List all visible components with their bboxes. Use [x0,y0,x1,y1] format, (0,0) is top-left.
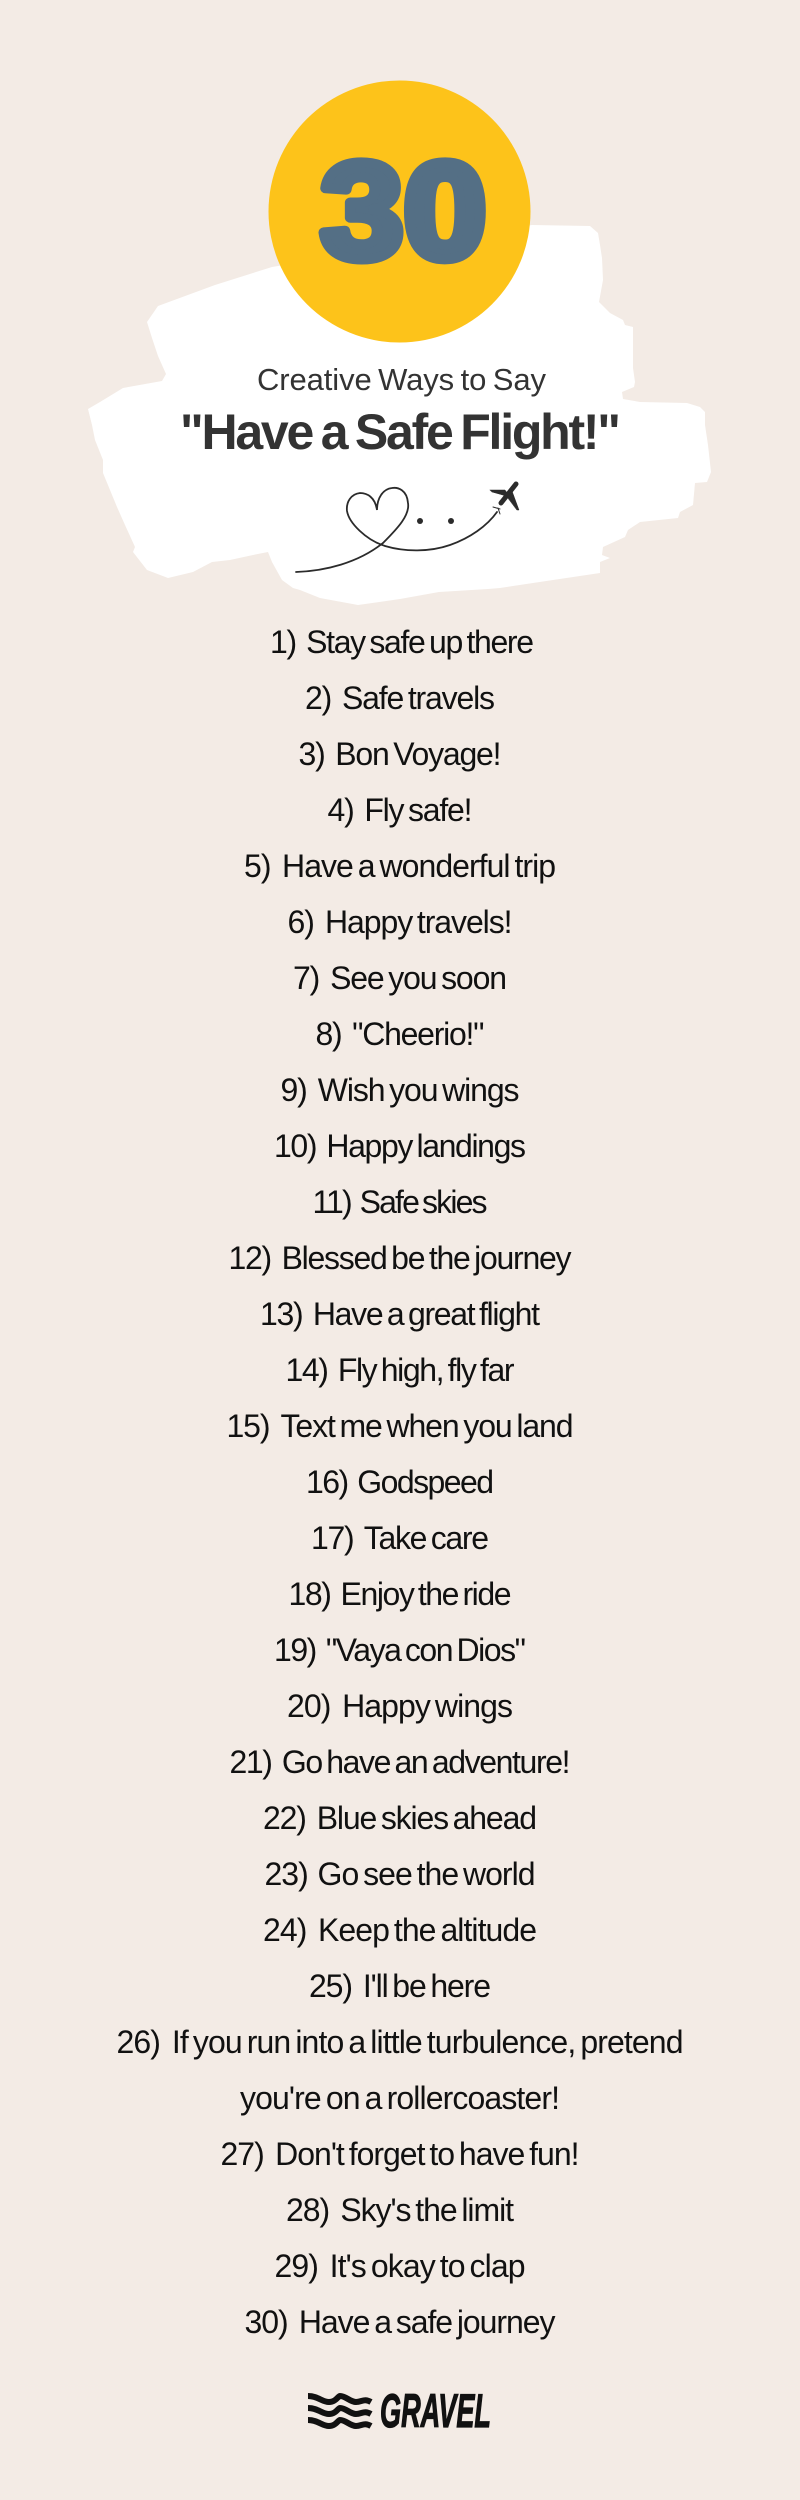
item 28: 28) Sky's the limit [286,2192,514,2228]
icon: waves [308,2396,371,2426]
main title: "Have a Safe Flight!" [180,404,621,460]
item 8: 8) "Cheerio!" [316,1016,484,1052]
item 17: 17) Take care [311,1520,489,1556]
item 16: 16) Godspeed [306,1464,494,1500]
item 3: 3) Bon Voyage! [298,736,502,772]
airplane [490,484,519,514]
item 21: 21) Go have an adventure! [230,1744,570,1780]
item 22: 22) Blue skies ahead [263,1800,537,1836]
item 14: 14) Fly high, fly far [286,1352,515,1388]
item 5: 5) Have a wonderful trip [244,848,556,884]
item 24: 24) Keep the altitude [263,1912,537,1948]
item 10: 10) Happy landings [274,1128,526,1164]
item 11: 11) Safe skies [312,1184,488,1220]
number 30: 30 [320,135,486,288]
item 26 line 1: 26) If you run into a little turbulence, pretend [116,2024,684,2060]
item 27: 27) Don't forget to have fun! [220,2136,580,2172]
white brush stroke panel [88,225,711,605]
item 13: 13) Have a great flight [260,1296,540,1332]
item 2: 2) Safe travels [305,680,495,716]
icon: heart flight path with airplane [296,484,519,572]
item 15: 15) Text me when you land [226,1408,574,1444]
item 29: 29) It's okay to clap [274,2248,526,2284]
item 6: 6) Happy travels! [288,904,512,940]
item 25: 25) I'll be here [309,1968,491,2004]
item 30: 30) Have a safe journey [244,2304,556,2340]
item 23: 23) Go see the world [264,1856,536,1892]
yellow circle badge [268,80,530,342]
item 18: 18) Enjoy the ride [288,1576,512,1612]
item 19: 19) "Vaya con Dios" [274,1632,526,1668]
list of 30 phrases [116,624,684,2340]
subtitle: Creative Ways to Say [257,362,546,397]
item 12: 12) Blessed be the journey [228,1240,572,1276]
Gravel logo [308,2384,491,2437]
dots [417,518,454,524]
item 9: 9) Wish you wings [280,1072,520,1108]
item 20: 20) Happy wings [287,1688,513,1724]
wordmark: GRAVEL [380,2384,491,2437]
item 4: 4) Fly safe! [328,792,472,828]
item 1: 1) Stay safe up there [270,624,534,660]
item 26 line 2: you're on a rollercoaster! [240,2080,560,2116]
item 7: 7) See you soon [293,960,507,996]
